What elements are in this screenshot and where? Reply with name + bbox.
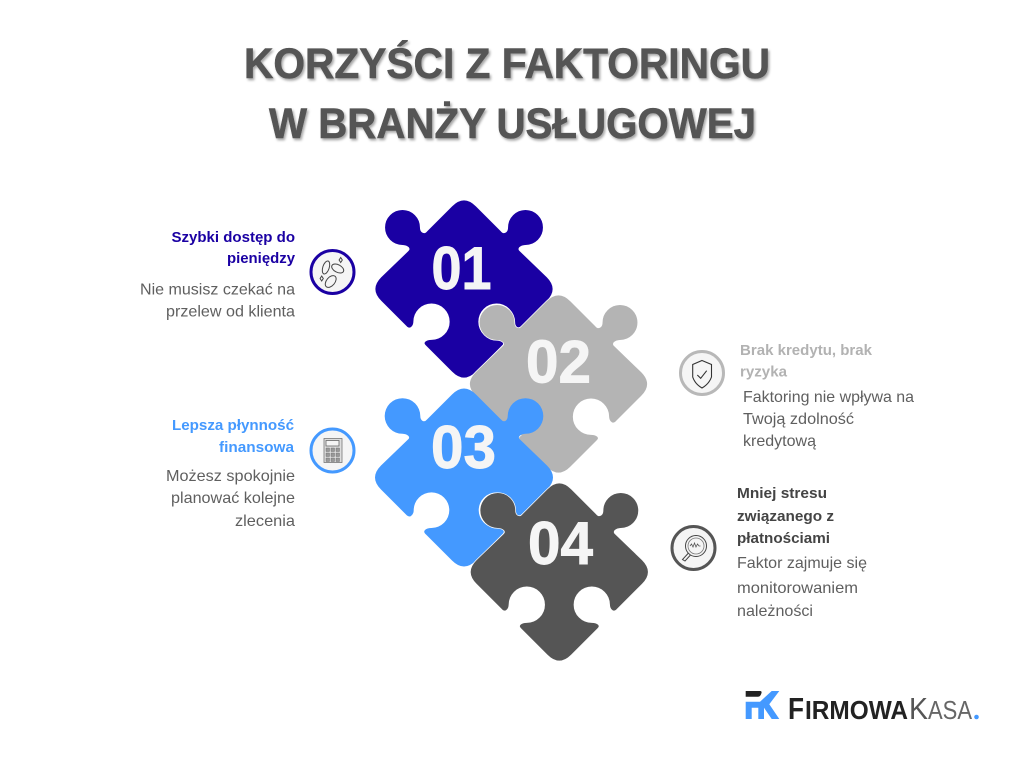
icon: coins [311,250,354,294]
text block: benefit 1: przelew od klienta [166,304,295,320]
puzzle piece 02: 02 [526,328,591,396]
puzzle piece 04: 04 [528,510,594,577]
text block: benefit 4: Faktor zajmuje się [737,555,867,572]
puzzle piece 01 [375,200,553,378]
puzzle piece 01: 01 [432,235,492,302]
puzzle piece 04 [470,483,648,661]
icon: calculator [311,429,354,472]
title: W BRANŻY USŁUGOWEJ [269,100,756,148]
text block: benefit 4: płatnościami [737,530,830,547]
text block: benefit 2: ryzyka [740,364,788,380]
text block: benefit 2 [740,342,914,450]
text block: benefit 4: Mniej stresu [737,485,827,502]
text block: benefit 4: należności [737,603,813,620]
text block: benefit 2: Twoją zdolność [743,411,854,428]
logo: FirmowaKasa [746,691,979,726]
puzzle piece 03 [375,388,553,566]
puzzle piece 03: 03 [431,414,496,481]
text block: benefit 1: pieniędzy [227,250,296,267]
icon: magnifier [672,526,715,570]
title [244,39,770,148]
icon: shield [680,352,724,394]
text block: benefit 4: związanego z [737,508,834,525]
logo: FirmowaKasa: IRMOWA [805,697,908,725]
title: KORZYŚCI Z FAKTORINGU [244,39,770,88]
text block: benefit 4: monitorowaniem [737,580,858,597]
text block: benefit 2: Brak kredytu, brak [740,342,873,359]
logo: FirmowaKasa: ASA [928,695,973,725]
text block: benefit 1 [140,229,296,320]
text block: benefit 2: Faktoring nie wpływa na [743,389,914,406]
logo: FirmowaKasa: F [788,692,804,726]
text block: benefit 3: Lepsza płynność [172,417,294,434]
text block: benefit 3: planować kolejne [171,490,295,507]
text block: benefit 2: kredytową [743,433,816,450]
text block: benefit 3: zlecenia [235,513,295,530]
text block: benefit 3 [166,417,295,530]
text block: benefit 3: Możesz spokojnie [166,468,295,485]
text block: benefit 4 [737,485,867,620]
text block: benefit 3: finansowa [219,439,295,456]
puzzle piece 02 [470,295,648,473]
logo: FirmowaKasa: K [909,692,928,726]
text block: benefit 1: Szybki dostęp do [172,229,295,246]
text block: benefit 1: Nie musisz czekać na [140,282,295,298]
